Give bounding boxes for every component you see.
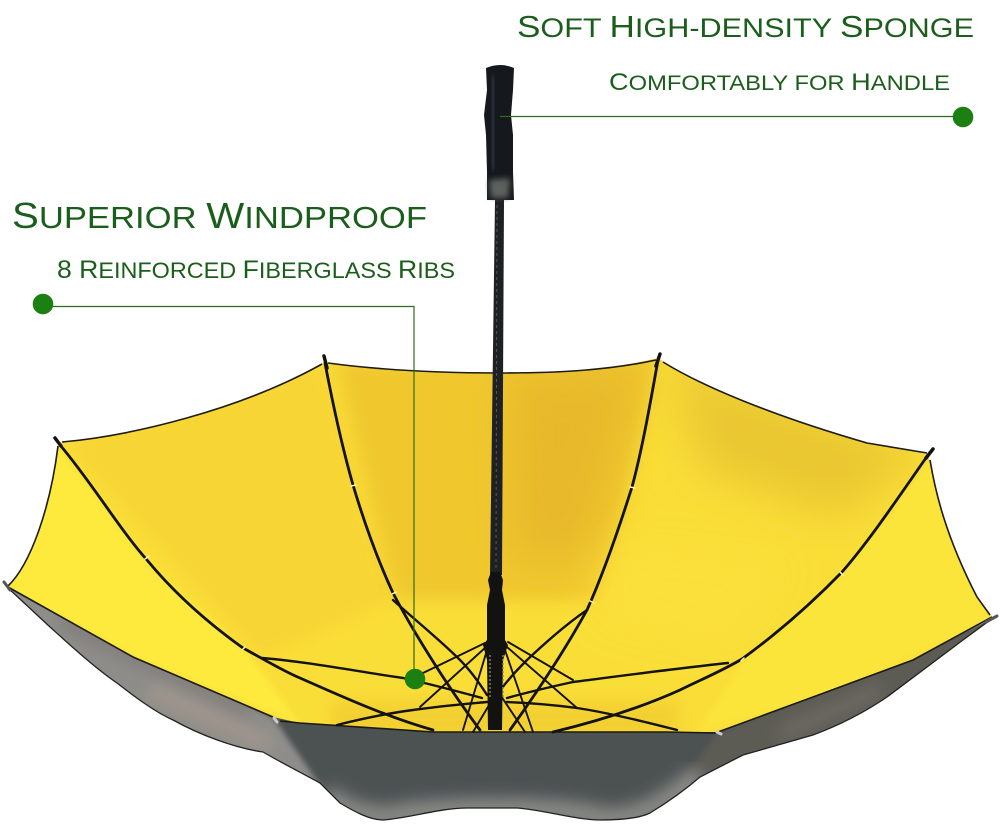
canopy outer grey fabric: [12, 590, 985, 820]
foam handle: [484, 65, 514, 200]
stretchers: [262, 600, 728, 730]
start dot: [33, 294, 53, 314]
callout subheading: 8 REINFORCED FIBERGLASS RIBS: [57, 256, 455, 284]
umbrella shaft: [483, 200, 508, 730]
callout heading: SOFT HIGH-DENSITY SPONGE: [517, 9, 974, 44]
left inner panel shading: [61, 363, 379, 644]
canopy rim: [8, 360, 992, 732]
upper shaft: [490, 200, 504, 575]
leader line: [48, 306, 414, 675]
rib nicks: [145, 485, 843, 661]
bright outer panels: [8, 446, 300, 725]
end dot: [405, 669, 425, 689]
handle collar: [489, 178, 510, 198]
rim ferrules: [4, 582, 997, 734]
callout: handle: [500, 9, 974, 127]
umbrella ribs and stretchers: [4, 354, 997, 734]
callout: ribs: [12, 195, 455, 689]
runner collar: [483, 572, 508, 730]
spring coil: [490, 655, 503, 698]
hub struts: [420, 642, 577, 732]
hub area shading: [332, 702, 678, 731]
callout subheading: COMFORTABLY FOR HANDLE: [609, 69, 950, 96]
leader line: [500, 116, 958, 118]
right inner panel shading: [665, 355, 930, 520]
leader dot: [953, 107, 973, 127]
rib tips: [55, 354, 933, 458]
canopy yellow lining: [0, 340, 1000, 740]
callout heading: SUPERIOR WINDPROOF: [12, 195, 427, 236]
center panel shading: [335, 355, 655, 600]
umbrella canopy underside: [0, 340, 1000, 828]
main ribs: [60, 360, 928, 732]
